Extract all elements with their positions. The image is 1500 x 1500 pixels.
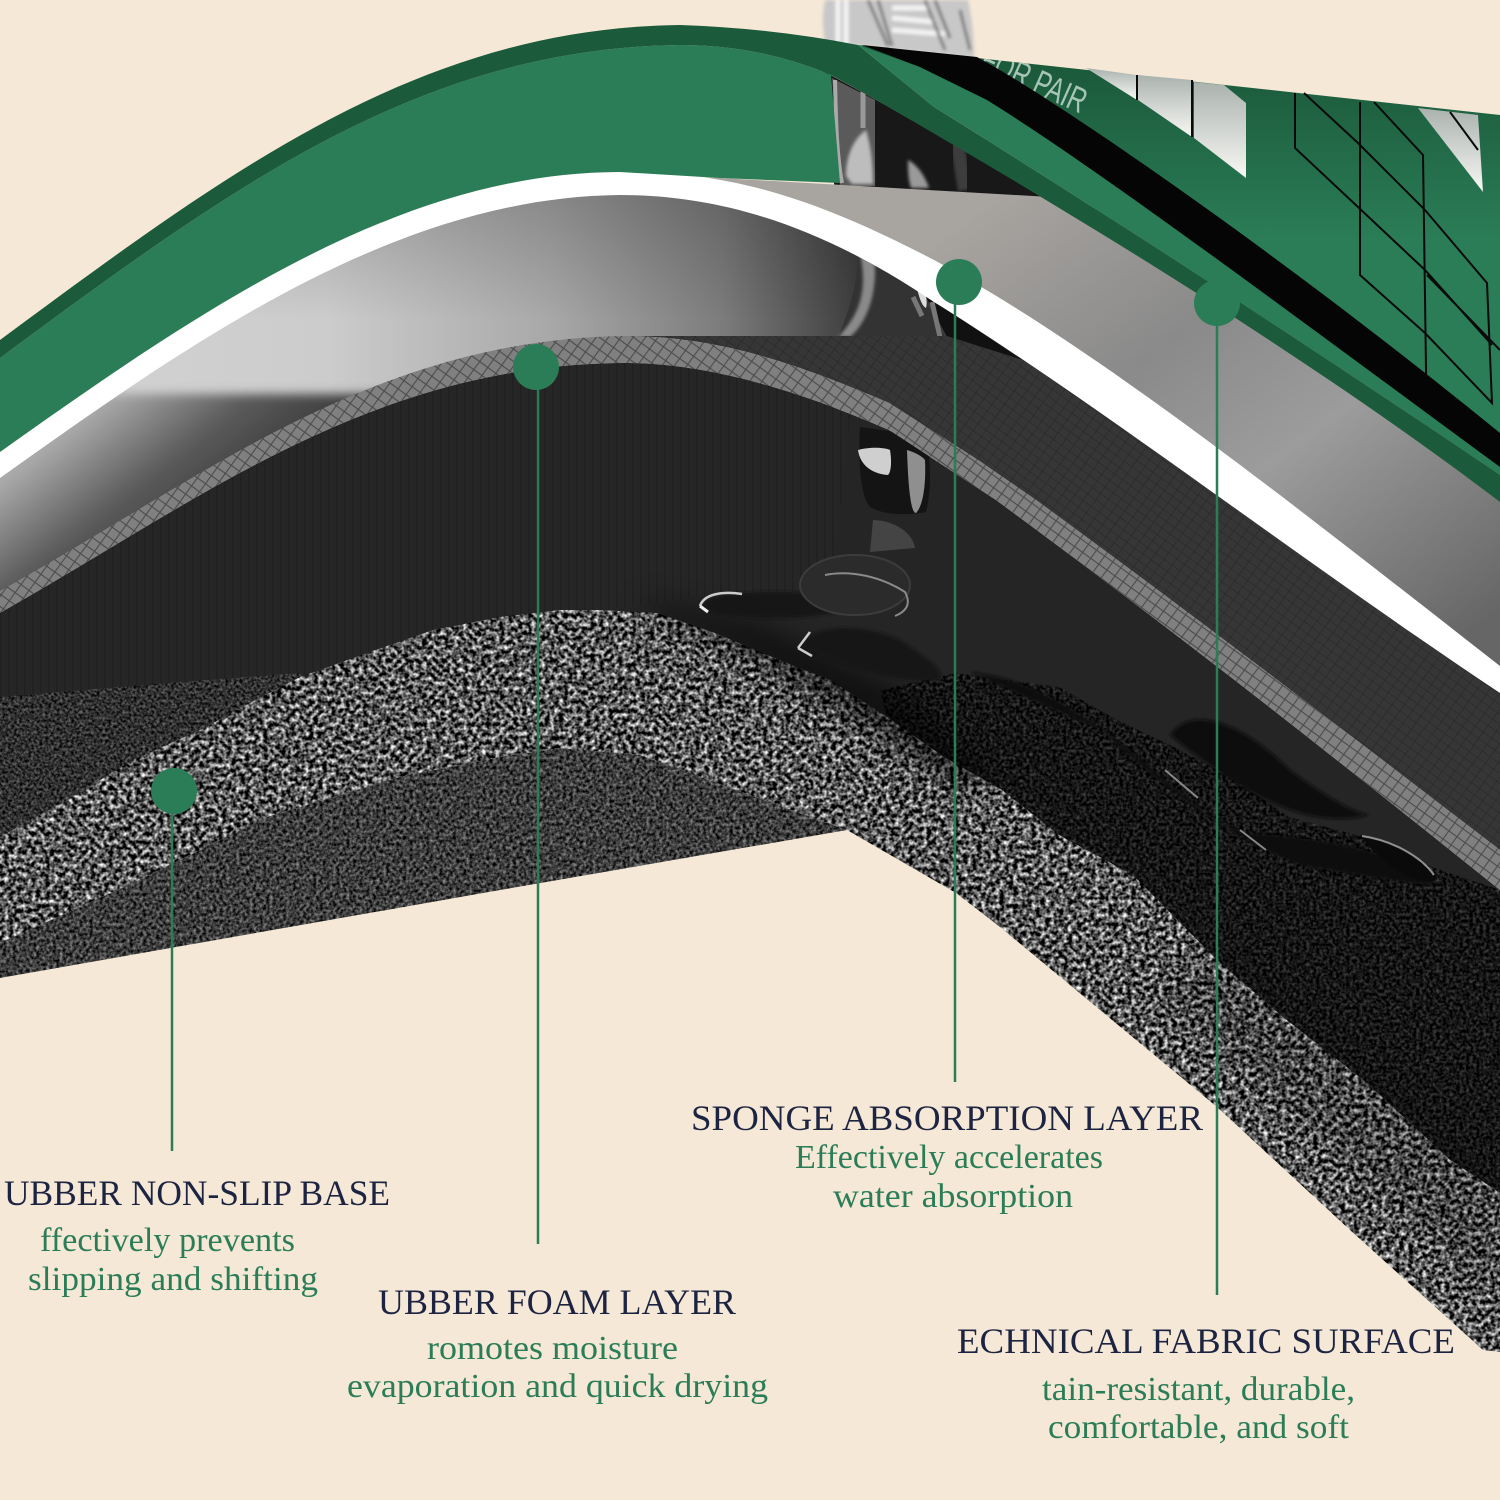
leader: rubber non-slip base <box>151 768 197 1151</box>
label: rubber foam layer: romotes moisture <box>427 1330 678 1367</box>
label: technical fabric surface: tain-resistant, durable, <box>1042 1371 1355 1408</box>
label: technical fabric surface <box>957 1321 1455 1446</box>
grey surface layer <box>620 175 1500 680</box>
leader: sponge absorption layer <box>936 259 982 1082</box>
sponge fine stripes <box>0 363 850 697</box>
label: rubber foam layer: UBBER FOAM LAYER <box>378 1282 736 1322</box>
label: rubber foam layer: evaporation and quick drying <box>347 1368 768 1405</box>
mesh fabric top surface <box>623 336 1500 850</box>
rubber base layer <box>0 740 860 985</box>
label: rubber non-slip base: UBBER NON-SLIP BASE <box>4 1173 390 1213</box>
water droplets on sponge <box>700 555 1435 885</box>
printed grid lines <box>1137 75 1500 440</box>
sponge layer interior <box>0 363 1500 1193</box>
shoe: mid section <box>832 78 965 190</box>
black stripe <box>862 45 1500 467</box>
green band beneath black stripe <box>858 45 1500 475</box>
rubber foam layer <box>0 600 1500 1360</box>
silver printed blocks <box>1086 68 1483 192</box>
green surface: right section <box>858 45 1500 470</box>
underside arch <box>0 170 1070 634</box>
shoe: lower sole behind arch <box>838 253 945 337</box>
leader: rubber foam layer <box>513 344 559 1244</box>
label: rubber non-slip base: slipping and shifting <box>28 1261 318 1298</box>
label: sponge absorption layer <box>691 1098 1203 1215</box>
shoe: metallic sole visible above the mat <box>823 0 974 58</box>
foam darkening at lower right <box>1150 960 1500 1300</box>
white layer <box>0 172 1500 693</box>
shoe: capsule under mesh <box>858 427 930 552</box>
label: sponge absorption layer: SPONGE ABSORPTION LAYER <box>691 1098 1203 1138</box>
label: technical fabric surface: ECHNICAL FABRIC SURFACE <box>957 1321 1455 1361</box>
label: rubber foam layer <box>347 1282 768 1405</box>
green surface: left section <box>0 45 840 452</box>
label: rubber non-slip base <box>4 1173 390 1298</box>
label: rubber non-slip base: ffectively prevents <box>40 1222 295 1259</box>
label: sponge absorption layer: water absorption <box>833 1178 1073 1215</box>
leader: technical fabric surface <box>1194 280 1240 1295</box>
black area behind green <box>825 72 1070 210</box>
mesh fabric edge band <box>0 336 1500 890</box>
base layer wedge behind foam <box>0 673 302 837</box>
dark foam section <box>850 660 1500 1200</box>
foam shadow under sponge at top <box>640 600 1000 790</box>
green dark upper stripe <box>0 25 1500 502</box>
label: sponge absorption layer: Effectively accelerates <box>795 1139 1103 1176</box>
printed label text: FOR PAIR <box>975 40 1093 121</box>
label: technical fabric surface: comfortable, and soft <box>1048 1409 1350 1446</box>
black gap under white layer <box>925 295 1060 385</box>
